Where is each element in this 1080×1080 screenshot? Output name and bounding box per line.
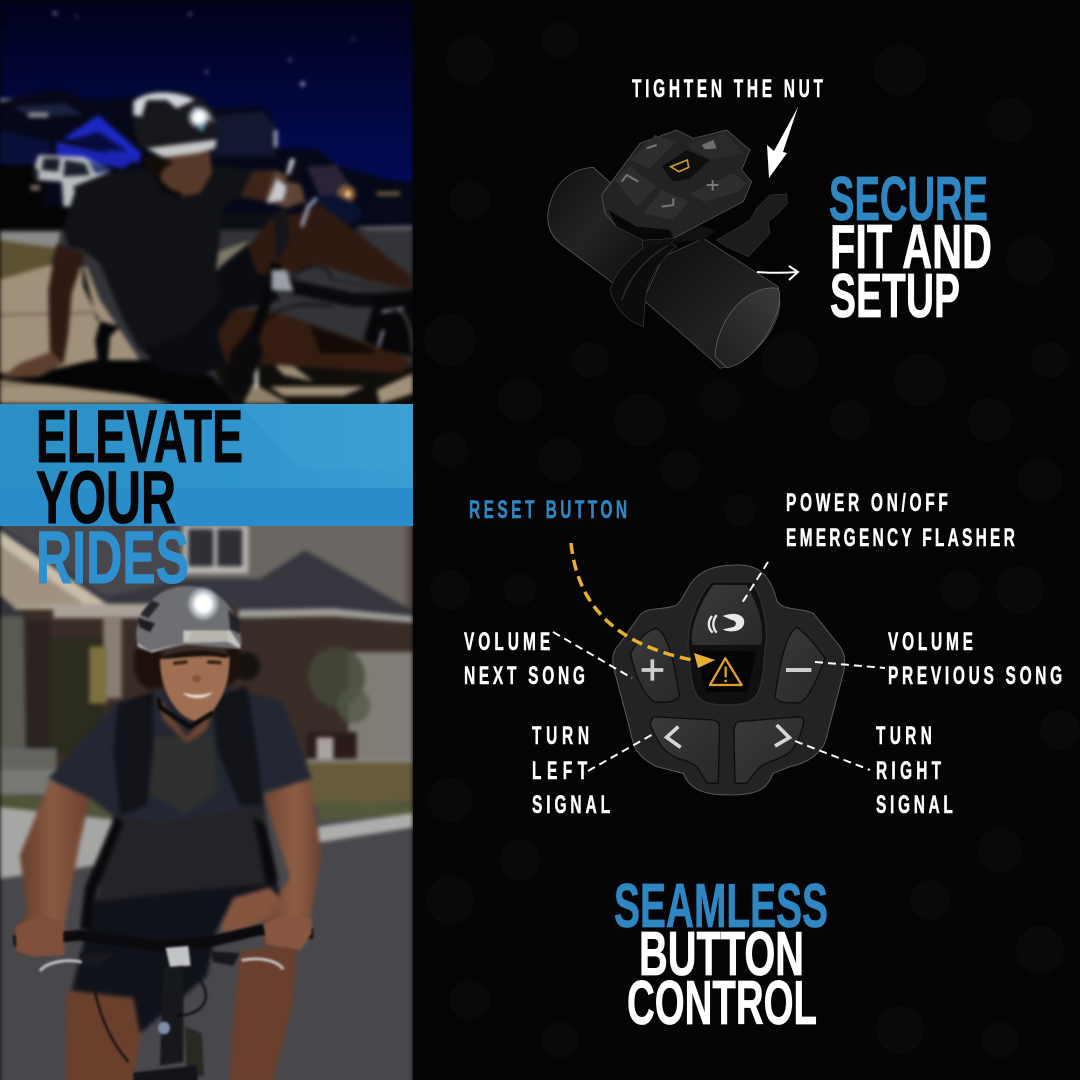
labels: button functions: VOLUME	[888, 628, 973, 656]
arrow: small rotation pointer from grip	[757, 266, 798, 280]
labels: button functions: VOLUME	[464, 628, 550, 656]
labels: button functions	[464, 489, 1062, 819]
heading: Seamless Button Control: BUTTON	[639, 920, 804, 989]
photo: smiling rider on a bike with helmet light on	[0, 520, 413, 1080]
device: remote mounted on handlebar grip	[548, 130, 787, 368]
labels: button functions: RIGHT	[876, 757, 941, 785]
button: left signal	[650, 717, 720, 783]
labels: button functions: TURN	[532, 722, 589, 750]
label: tighten the nut: TIGHTEN THE NUT	[632, 75, 823, 103]
labels: button functions: TURN	[876, 722, 932, 750]
button icon: warning triangle	[710, 658, 742, 685]
device: button layout remote	[613, 565, 845, 795]
labels: button functions: POWER ON/OFF	[786, 489, 948, 517]
heading: Seamless Button Control: SEAMLESS	[614, 872, 828, 941]
labels: button functions: LEFT	[532, 757, 587, 785]
button: minus	[775, 627, 825, 703]
heading: Seamless Button Control	[614, 872, 828, 1038]
heading: Secure Fit and Setup	[829, 165, 992, 331]
heading: Secure Fit and Setup: SECURE	[829, 165, 988, 234]
blue banner behind headline	[0, 404, 413, 526]
button icon: power / flasher	[709, 614, 744, 633]
labels: button functions: SIGNAL	[532, 791, 610, 819]
labels: button functions: EMERGENCY FLASHER	[786, 524, 1015, 552]
labels: button functions: RESET BUTTON	[469, 496, 627, 524]
headline: Elevate Your Rides: YOUR	[36, 456, 176, 539]
button: plus	[631, 628, 679, 702]
headline: Elevate Your Rides: RIDES	[36, 516, 189, 599]
arrow: tighten the nut pointer	[767, 107, 798, 178]
labels: button functions: PREVIOUS SONG	[888, 662, 1062, 690]
heading: Secure Fit and Setup: FIT AND	[830, 213, 992, 282]
heading: Secure Fit and Setup: SETUP	[830, 262, 960, 331]
headline: Elevate Your Rides: ELEVATE	[36, 395, 243, 478]
button: right signal	[734, 717, 804, 783]
heading: Seamless Button Control: CONTROL	[627, 969, 817, 1038]
labels: button functions: NEXT SONG	[464, 662, 585, 690]
callout lines: white dashed leaders	[553, 562, 885, 771]
arrow: reset button yellow dashed	[571, 543, 715, 668]
labels: button functions: SIGNAL	[876, 791, 953, 819]
photo: rider sitting at night checking the handlebar remote	[0, 0, 413, 404]
headline: Elevate Your Rides	[36, 395, 243, 599]
